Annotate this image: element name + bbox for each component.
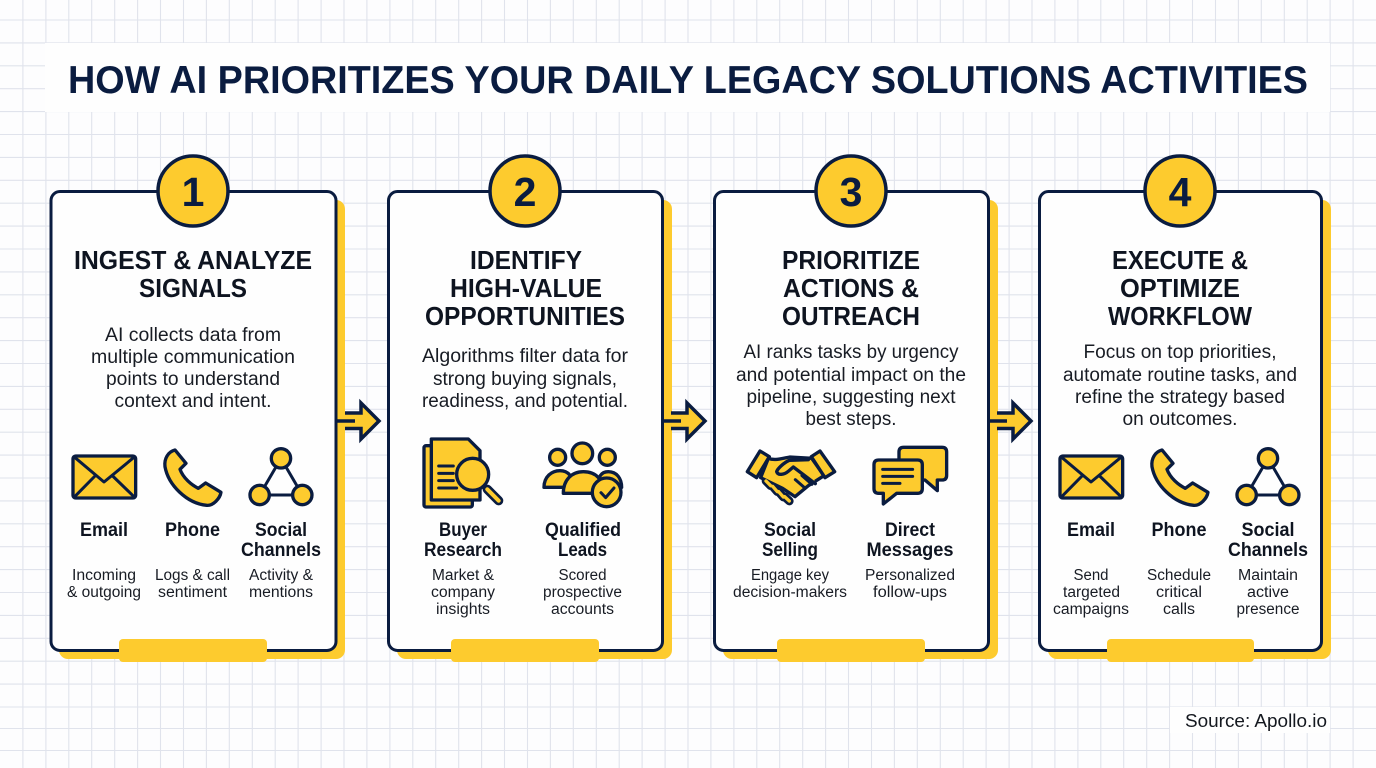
step 2 description	[422, 346, 629, 412]
direct messages label: Direct	[885, 520, 936, 541]
qualified leads label: Scored	[558, 567, 606, 584]
step 4 heading: EXECUTE &	[1112, 245, 1248, 275]
title: HOW AI PRIORITIZES YOUR DAILY LEGACY SOLUTIONS ACTIVITIES	[68, 59, 1308, 102]
buyer research label: company	[431, 584, 495, 601]
social selling label	[733, 520, 847, 601]
arrow: step 2 to step 3	[662, 403, 705, 439]
step 4 badge	[1145, 156, 1215, 226]
icon: handshake	[747, 451, 835, 501]
step 1 description: points to understand	[106, 369, 280, 390]
step 3 description: best steps.	[806, 409, 896, 430]
icon: email	[73, 456, 136, 498]
buyer research label: insights	[436, 601, 490, 618]
social channels label: Maintain	[1238, 567, 1298, 584]
social channels label	[1228, 520, 1308, 618]
panel: step 4 execute and optimize workflow	[1040, 156, 1331, 662]
card 2 shadow	[397, 200, 672, 659]
step 1 heading: SIGNALS	[139, 273, 247, 303]
step 4 heading	[1108, 245, 1252, 331]
buyer research label: Research	[424, 540, 502, 561]
icon: buyer research document and magnifier	[424, 439, 499, 507]
social selling label: Engage key	[751, 567, 829, 584]
step 3 description	[736, 342, 966, 430]
panel: step 3 prioritize actions and outreach	[714, 156, 998, 662]
step 1 description: AI collects data from	[105, 325, 281, 346]
card 2 body	[388, 192, 662, 650]
icon: phone	[1152, 450, 1208, 505]
step 1 badge	[158, 156, 228, 226]
card 4 shadow	[1048, 200, 1331, 659]
step 2 heading: OPPORTUNITIES	[425, 301, 625, 331]
social channels label: mentions	[249, 584, 313, 601]
step 4 heading: WORKFLOW	[1108, 301, 1252, 331]
step 1 badge: 1	[182, 169, 204, 215]
step 1 description: context and intent.	[114, 391, 272, 412]
step 2 heading: IDENTIFY	[470, 245, 582, 275]
card 1 shadow	[59, 200, 345, 659]
card 3 bottom tab	[777, 639, 925, 662]
step 2 heading	[425, 245, 625, 331]
icon: social network	[1237, 449, 1299, 505]
social channels label	[241, 520, 321, 601]
social channels label: active	[1247, 584, 1289, 601]
step 2 heading: HIGH-VALUE	[450, 273, 602, 303]
phone label	[155, 520, 230, 601]
social channels label: Channels	[241, 540, 321, 561]
social channels label: Channels	[1228, 540, 1308, 561]
step 4 badge: 4	[1169, 169, 1192, 215]
direct messages label: follow-ups	[873, 584, 947, 601]
phone label: sentiment	[158, 584, 228, 601]
icon: phone	[165, 450, 221, 505]
phone label	[1147, 520, 1211, 618]
buyer research label: Market &	[432, 567, 495, 584]
card 4 body	[1040, 192, 1322, 650]
social selling label: Selling	[762, 540, 818, 561]
qualified leads label	[543, 520, 622, 618]
card 3 shadow	[723, 200, 998, 659]
social selling label: Social	[764, 520, 816, 541]
card 4 bottom tab	[1107, 639, 1254, 662]
card 2 bottom tab	[451, 639, 599, 662]
social channels label: presence	[1236, 601, 1300, 618]
step 1 heading	[74, 245, 312, 303]
arrow: step 1 to step 2	[336, 403, 379, 439]
email label: Email	[80, 520, 128, 541]
step 3 description: pipeline, suggesting next	[746, 387, 956, 408]
card 3 body	[714, 192, 988, 650]
step 3 description: AI ranks tasks by urgency	[744, 342, 959, 363]
phone label: Schedule	[1147, 567, 1211, 584]
step 1 description: multiple communication	[91, 347, 295, 368]
social selling label: decision-makers	[733, 584, 847, 601]
step 4 description	[1063, 342, 1297, 430]
step 1 description	[91, 325, 295, 412]
panel: step 2 identify high-value opportunities	[388, 156, 672, 662]
step 3 description: and potential impact on the	[736, 365, 966, 386]
panel: step 1 ingest and analyze signals	[51, 156, 345, 662]
source note: Source: Apollo.io	[1185, 711, 1327, 731]
icon: social network	[250, 449, 312, 505]
qualified leads label: accounts	[551, 601, 614, 618]
email label: campaigns	[1053, 601, 1129, 618]
direct messages label: Messages	[866, 540, 954, 561]
phone label: critical	[1156, 584, 1202, 601]
email label	[1053, 520, 1129, 618]
qualified leads label: Qualified	[545, 520, 621, 541]
icon: direct messages chat bubbles	[874, 447, 947, 504]
step 4 description: on outcomes.	[1122, 409, 1238, 430]
step 4 heading: OPTIMIZE	[1120, 273, 1240, 303]
phone label: calls	[1163, 601, 1195, 618]
email label: Send	[1074, 567, 1108, 584]
step 3 heading	[782, 245, 920, 331]
email label	[67, 520, 141, 601]
icon: email	[1060, 456, 1123, 498]
step 3 heading: ACTIONS &	[783, 273, 919, 303]
phone label: Phone	[165, 520, 220, 541]
icon: qualified leads group with check	[544, 443, 622, 507]
email label: & outgoing	[67, 584, 141, 601]
phone label: Logs & call	[155, 567, 230, 584]
step 3 heading: OUTREACH	[782, 301, 920, 331]
phone label: Phone	[1152, 520, 1206, 541]
email label: Incoming	[72, 567, 136, 584]
qualified leads label: Leads	[558, 540, 607, 561]
step 2 description: Algorithms filter data for	[422, 346, 629, 367]
buyer research label	[424, 520, 502, 618]
step 3 heading: PRIORITIZE	[782, 245, 920, 275]
step 3 badge: 3	[840, 169, 862, 215]
card 1 bottom tab	[119, 639, 267, 662]
email label: targeted	[1063, 584, 1120, 601]
direct messages label	[865, 520, 955, 601]
qualified leads label: prospective	[543, 584, 622, 601]
step 2 badge: 2	[514, 169, 536, 215]
step 3 badge	[816, 156, 886, 226]
step 4 description: automate routine tasks, and	[1063, 365, 1297, 386]
step 4 description: refine the strategy based	[1075, 387, 1285, 408]
direct messages label: Personalized	[865, 567, 955, 584]
title	[45, 43, 1330, 112]
social channels label: Social	[255, 520, 307, 541]
step 2 description: readiness, and potential.	[422, 391, 628, 412]
step 4 description: Focus on top priorities,	[1084, 342, 1276, 363]
social channels label: Social	[1242, 520, 1294, 541]
step 2 badge	[490, 156, 560, 226]
email label: Email	[1067, 520, 1115, 541]
card 1 body	[51, 192, 336, 650]
social channels label: Activity &	[249, 567, 314, 584]
step 1 heading: INGEST & ANALYZE	[74, 245, 312, 275]
source note	[1170, 707, 1330, 733]
step 2 description: strong buying signals,	[433, 369, 617, 390]
arrow: step 3 to step 4	[988, 403, 1031, 439]
buyer research label: Buyer	[439, 520, 488, 541]
